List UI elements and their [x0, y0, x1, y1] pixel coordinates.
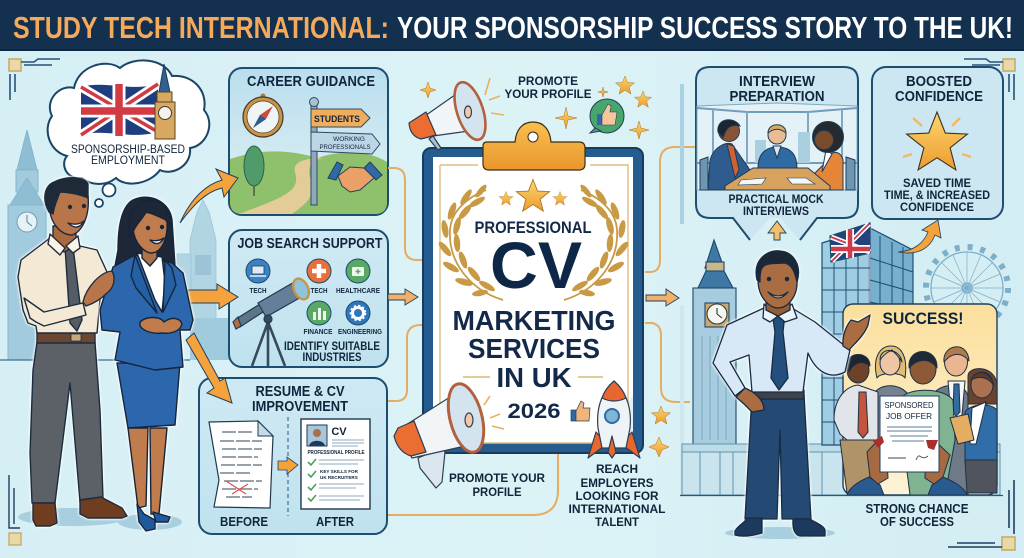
icon: signpost: STUDENTS — [314, 114, 360, 124]
text: reach employers: LOOKING FOR — [576, 489, 659, 503]
arrow: up to interview — [768, 221, 786, 240]
panel: job search support — [229, 230, 388, 367]
text: sponsorship-based employment: EMPLOYMENT — [91, 155, 165, 167]
text: reach employers: TALENT — [595, 515, 640, 529]
panel: boosted confidence — [872, 67, 1003, 219]
text: saved time: TIME, & INCREASED — [884, 188, 990, 202]
corner decoration: top right — [964, 59, 1015, 100]
arrow: clipboard to candidate — [646, 289, 679, 306]
background panel: right scene — [680, 84, 684, 495]
labels: ENGINEERING — [338, 329, 382, 336]
icon: signpost: WORKING — [333, 136, 365, 143]
icon: Big Ben small — [155, 64, 175, 139]
connector: clipboard bottom to resume — [388, 443, 558, 515]
icon: tech cross — [307, 259, 331, 283]
heading: CAREER GUIDANCE — [247, 74, 375, 90]
title banner — [0, 0, 1024, 51]
sponsored job offer document: SPONSORED — [884, 401, 934, 410]
text: 2026: 2026 — [508, 400, 560, 423]
ground line — [680, 494, 1003, 496]
heading: IMPROVEMENT — [252, 399, 348, 415]
icon: stars lower right — [649, 406, 670, 457]
icon: compass — [243, 94, 283, 137]
text: professional: PROFESSIONAL — [474, 218, 592, 237]
text: strong chance of success: STRONG CHANCE — [866, 501, 969, 516]
divider and arrow — [287, 417, 289, 516]
labels: HEALTHCARE — [336, 288, 380, 295]
document: before — [209, 421, 273, 508]
team of people — [834, 346, 997, 495]
building: low colonnade — [682, 444, 1000, 495]
hand on shoulder — [83, 271, 114, 306]
text: practical mock interviews — [728, 192, 824, 218]
icon: healthcare — [346, 259, 370, 283]
background skyline left: gothic tower — [177, 200, 230, 360]
labels: FINANCE — [304, 329, 333, 336]
illustration: mock interview — [697, 103, 857, 190]
clip — [483, 122, 585, 170]
labels: TECH — [310, 288, 328, 295]
clipboard: professional cv marketing services — [423, 122, 643, 453]
ground line left — [0, 359, 190, 361]
text: promote your profile top: PROMOTE — [518, 74, 578, 88]
title banner: STUDY TECH INTERNATIONAL: — [13, 10, 389, 45]
text: identify suitable industries — [284, 341, 380, 364]
arrow: to job search — [188, 284, 238, 309]
arrow: to boosted confidence — [898, 220, 941, 253]
icon: signpost — [310, 98, 380, 205]
text: cv: CV — [490, 228, 582, 302]
document: after: KEY SKILLS FOR — [320, 469, 359, 474]
corner decoration: top left — [9, 59, 60, 100]
corner decoration: bottom right — [948, 480, 1015, 550]
document: after: UK RECRUITERS — [320, 475, 358, 480]
text: sponsorship-based employment — [71, 144, 185, 167]
connector: clipboard to interview — [645, 147, 695, 272]
text: practical mock interviews: INTERVIEWS — [743, 204, 809, 218]
text: reach employers: INTERNATIONAL — [568, 502, 666, 516]
sponsored job offer document: JOB OFFER — [886, 412, 932, 421]
text: saved time — [884, 176, 990, 214]
document: after: PROFESSIONAL PROFILE — [308, 450, 365, 456]
connector: career guidance to clipboard — [388, 168, 423, 260]
icon: telescope — [233, 276, 312, 366]
text: reach employers — [568, 462, 666, 529]
heading: SUCCESS! — [882, 309, 964, 328]
icon: UK flag — [81, 84, 158, 136]
text: promote your profile top — [504, 74, 592, 101]
icon: gold star — [903, 112, 971, 170]
document: after: CV — [331, 426, 347, 438]
heading — [730, 74, 824, 105]
stars — [499, 180, 567, 211]
text: identify suitable industries: INDUSTRIES — [302, 352, 362, 364]
labels — [250, 288, 382, 336]
heading — [895, 74, 983, 105]
text: saved time: SAVED TIME — [903, 176, 971, 190]
icon: thumb up small — [571, 401, 590, 421]
heading — [252, 384, 348, 415]
text: identify suitable industries: IDENTIFY SUITABLE — [284, 341, 380, 353]
text: promote your profile top: YOUR PROFILE — [504, 87, 592, 101]
heading: CONFIDENCE — [895, 89, 983, 105]
text: marketing services in uk: MARKETING — [452, 305, 616, 336]
text: sponsorship-based employment: SPONSORSHIP-BASED — [71, 144, 185, 156]
text: reach employers: EMPLOYERS — [580, 476, 654, 490]
building: Big Ben right — [693, 240, 736, 445]
icon: signpost: PROFESSIONALS — [320, 144, 371, 151]
heading: PREPARATION — [730, 89, 824, 105]
person: man with cream shirt — [18, 178, 127, 526]
arrow: job search to clipboard — [388, 289, 418, 305]
icon: tech laptop — [246, 259, 270, 283]
icon: rocket — [588, 381, 640, 458]
text: strong chance of success: OF SUCCESS — [880, 514, 954, 529]
megaphone: top — [409, 78, 504, 150]
icon: thumbs up bubble — [590, 99, 624, 133]
building: glass office with flag — [822, 223, 913, 445]
panel: resume and cv improvement — [199, 378, 387, 534]
icon: tree — [244, 146, 264, 196]
text: promote your profile bottom — [449, 471, 545, 499]
panel: interview preparation — [696, 67, 858, 240]
text: marketing services in uk — [452, 305, 616, 393]
text: promote your profile bottom: PROMOTE YOUR — [449, 471, 545, 485]
icon: finance — [307, 301, 331, 325]
corner decoration: bottom left — [9, 475, 21, 545]
megaphone: bottom — [394, 380, 504, 488]
text: reach employers: REACH — [596, 462, 638, 476]
thought cloud: sponsorship-based employment — [48, 60, 209, 184]
arrow: before to after — [278, 457, 298, 474]
labels: before and after: BEFORE — [220, 514, 268, 529]
icon: engineering — [346, 301, 370, 325]
connector: resume to clipboard — [388, 325, 423, 401]
connector: clipboard to success — [645, 323, 690, 402]
text: practical mock interviews: PRACTICAL MOCK — [728, 192, 824, 206]
labels: before and after — [220, 514, 355, 529]
text: marketing services in uk: IN UK — [496, 362, 572, 393]
heading: RESUME & CV — [256, 384, 345, 400]
person: candidate presenting success — [713, 251, 870, 539]
london eye — [926, 247, 1008, 329]
labels: TECH — [250, 288, 266, 295]
icon: handshake — [328, 162, 382, 192]
sponsored job offer document — [847, 396, 967, 495]
heading: JOB SEARCH SUPPORT — [238, 236, 383, 252]
arrow: to career guidance — [180, 169, 238, 223]
panel: career guidance — [229, 68, 388, 215]
thought bubbles — [95, 184, 116, 207]
text: promote your profile bottom: PROFILE — [472, 485, 522, 499]
document: after — [301, 419, 370, 509]
person: woman in blue blazer — [100, 197, 193, 531]
panel: success scene — [834, 304, 997, 495]
road — [239, 158, 322, 214]
text: saved time: CONFIDENCE — [900, 200, 974, 214]
arrow: to resume — [186, 333, 232, 403]
background skyline left: Big Ben — [8, 130, 46, 360]
hills — [230, 151, 387, 214]
text: strong chance of success — [866, 501, 969, 529]
gold frame — [440, 165, 628, 443]
icon: stars top right — [420, 76, 652, 139]
labels: before and after: AFTER — [316, 514, 355, 529]
heading: BOOSTED — [906, 74, 972, 90]
shadow: left figures — [18, 508, 182, 530]
laurel wreath — [437, 183, 630, 300]
heading: INTERVIEW — [739, 74, 815, 90]
text: marketing services in uk: SERVICES — [468, 333, 600, 364]
